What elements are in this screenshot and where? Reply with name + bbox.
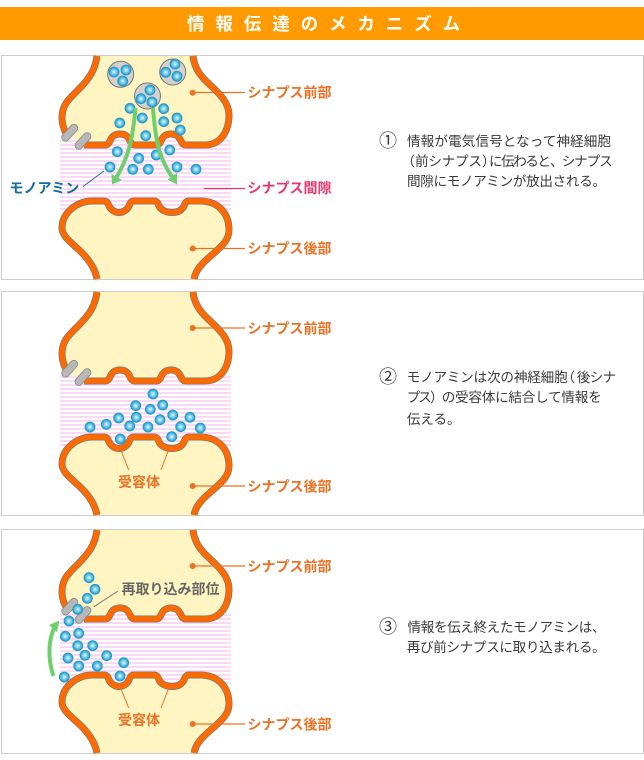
vesicle right bbox=[160, 59, 186, 85]
step 3 text: 再び前シナプスに取り込まれる。 bbox=[407, 639, 606, 655]
panel 3: reuptake bbox=[2, 530, 644, 754]
step 2 text: 伝える。 bbox=[407, 412, 461, 427]
step 2 text: プス bbox=[407, 390, 432, 405]
presynaptic terminal bbox=[60, 530, 231, 685]
step 2 text: ） bbox=[430, 390, 444, 405]
label: postsynaptic: シナプス後部 bbox=[248, 240, 332, 256]
monoamine particles bbox=[59, 572, 129, 682]
step 1 text: シナプス bbox=[562, 154, 613, 169]
label: synaptic cleft bbox=[204, 180, 332, 196]
label: monoamine bbox=[10, 171, 104, 196]
presynaptic terminal bbox=[60, 56, 231, 211]
label: receptor: 受容体 bbox=[118, 712, 160, 728]
label: postsynaptic: シナプス後部 bbox=[248, 716, 332, 732]
arrow: right release bbox=[153, 108, 177, 184]
label: presynaptic: シナプス前部 bbox=[248, 558, 332, 574]
label: postsynaptic bbox=[190, 716, 332, 732]
step 1 text: ① bbox=[379, 131, 397, 151]
arrow: reuptake bbox=[49, 620, 60, 676]
monoamine particles bbox=[85, 389, 206, 444]
label: monoamine: モノアミン bbox=[10, 180, 79, 196]
step 3 text: 情報を伝え終えたモノアミンは、 bbox=[408, 620, 606, 635]
label: synaptic cleft: シナプス間隙 bbox=[248, 180, 332, 196]
title banner bbox=[0, 7, 644, 40]
arrow: left release bbox=[112, 108, 136, 184]
label: reuptake site: 再取り込み部位 bbox=[122, 581, 220, 597]
step 1 text: 間隙にモノアミンが放出される。 bbox=[407, 174, 606, 189]
postsynaptic terminal bbox=[62, 675, 229, 753]
step 2 text bbox=[379, 367, 616, 427]
step 3 text: ③ bbox=[379, 617, 397, 637]
step 2 text: （ bbox=[562, 370, 575, 385]
step 1 text: （ bbox=[401, 154, 415, 169]
step 1 text bbox=[379, 131, 613, 189]
step 2 text: ② bbox=[379, 367, 397, 387]
vesicle centre bbox=[134, 83, 160, 109]
label: presynaptic bbox=[190, 320, 332, 336]
step 1 text: 前シナプス bbox=[415, 153, 482, 169]
vesicle left bbox=[108, 61, 134, 87]
presynaptic terminal bbox=[60, 292, 231, 447]
label: presynaptic: シナプス前部 bbox=[248, 320, 332, 336]
panel 1: release bbox=[2, 56, 644, 280]
label: receptor bbox=[118, 452, 168, 490]
step 1 text: 情報が電気信号となって神経細胞 bbox=[407, 134, 611, 149]
panel 2: binding bbox=[2, 292, 644, 516]
step 1 text: ） bbox=[482, 154, 496, 169]
label: receptor bbox=[118, 690, 168, 728]
label: presynaptic bbox=[190, 84, 332, 100]
step 2 text: モノアミンは次の神経細胞 bbox=[407, 370, 568, 385]
postsynaptic terminal bbox=[62, 437, 229, 515]
label: postsynaptic: シナプス後部 bbox=[248, 478, 332, 494]
title: 情報伝達のメカニズム bbox=[187, 14, 471, 34]
step 1 text: に伝わると bbox=[489, 154, 551, 169]
label: postsynaptic bbox=[190, 240, 332, 256]
step 2 text: 後シナ bbox=[577, 370, 616, 385]
label: postsynaptic bbox=[190, 478, 332, 494]
label: reuptake site bbox=[94, 581, 220, 607]
label: receptor: 受容体 bbox=[118, 474, 160, 490]
monoamine particles bbox=[105, 103, 201, 175]
label: presynaptic: シナプス前部 bbox=[248, 84, 332, 100]
postsynaptic terminal bbox=[62, 201, 229, 279]
step 1 text: 、 bbox=[550, 154, 564, 169]
step 3 text bbox=[379, 617, 606, 655]
label: presynaptic bbox=[190, 558, 332, 574]
step 2 text: の受容体に結合して情報を bbox=[442, 389, 602, 405]
